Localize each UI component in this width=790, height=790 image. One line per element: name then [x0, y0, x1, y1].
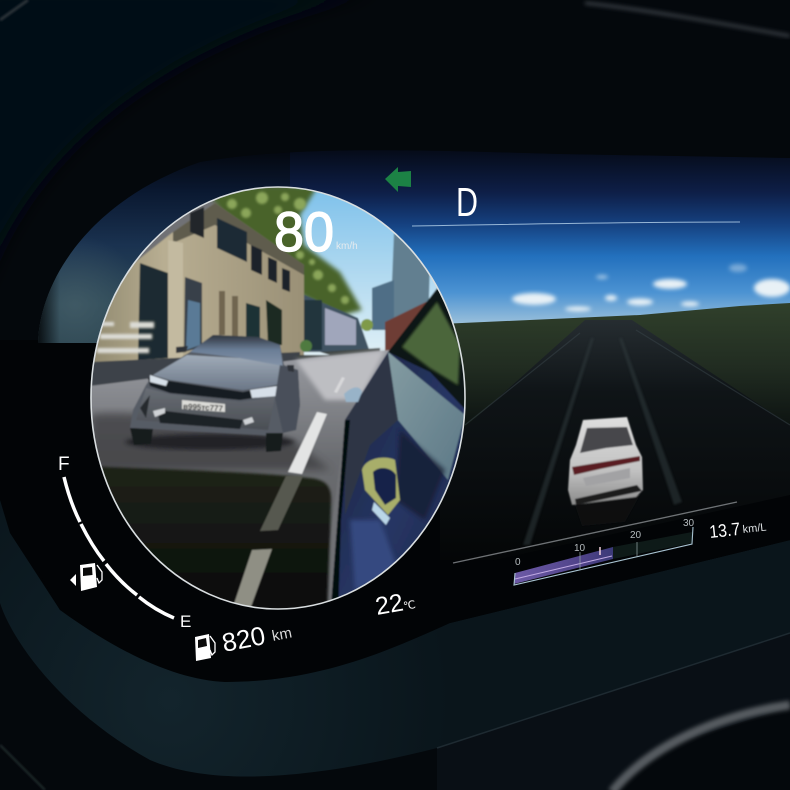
door glass — [388, 288, 464, 409]
towers — [391, 234, 430, 318]
lens rim — [91, 187, 465, 609]
fuel gauge — [58, 454, 191, 631]
ground — [454, 303, 790, 428]
road — [92, 349, 390, 562]
fuel gauge: F — [58, 454, 70, 475]
range readout — [195, 620, 293, 661]
temperature: 22 — [373, 589, 405, 621]
speed readout: km/h — [336, 241, 358, 252]
road — [488, 320, 762, 408]
icon: green turn arrow — [385, 167, 411, 192]
fuel gauge: E — [180, 612, 191, 631]
text: ℃ — [402, 599, 417, 613]
trees — [205, 186, 362, 316]
fuel economy bar: 20 — [630, 530, 642, 541]
panel: side view lens — [88, 185, 480, 620]
fuel economy bar: 0 — [515, 557, 521, 568]
left sky — [30, 148, 290, 343]
road shadow — [102, 465, 333, 608]
speed readout: 80 — [274, 200, 334, 263]
lane dashes — [288, 412, 327, 474]
fuel economy bar — [514, 518, 695, 585]
gear indicator: D — [456, 179, 478, 225]
car: own vehicle rear — [568, 417, 643, 526]
fuel economy bar: 30 — [683, 518, 695, 529]
shops row — [300, 293, 370, 352]
fuel economy readout: km/L — [742, 522, 767, 536]
fuel economy readout — [708, 519, 767, 542]
main building — [94, 224, 306, 362]
mirror reflection — [362, 458, 400, 515]
car: oncoming sedan — [125, 335, 300, 452]
icon: low fuel side arrow — [70, 563, 102, 591]
road fade line — [453, 502, 737, 563]
sky in lens — [296, 185, 440, 355]
black display area — [0, 340, 60, 610]
license plate: в995тс777 — [183, 402, 224, 413]
clouds — [512, 264, 790, 312]
fuel economy readout: 13.7 — [708, 519, 741, 542]
range readout: km — [271, 624, 293, 645]
fade to black at bottom of ground — [772, 497, 781, 500]
ego car side — [333, 348, 464, 597]
right sky — [290, 148, 790, 328]
range readout: 820 — [219, 620, 268, 658]
panel: cluster screen — [0, 140, 790, 700]
fuel economy bar: 10 — [574, 543, 586, 554]
icon: fuel pump — [195, 634, 215, 661]
horizon line — [412, 222, 740, 226]
